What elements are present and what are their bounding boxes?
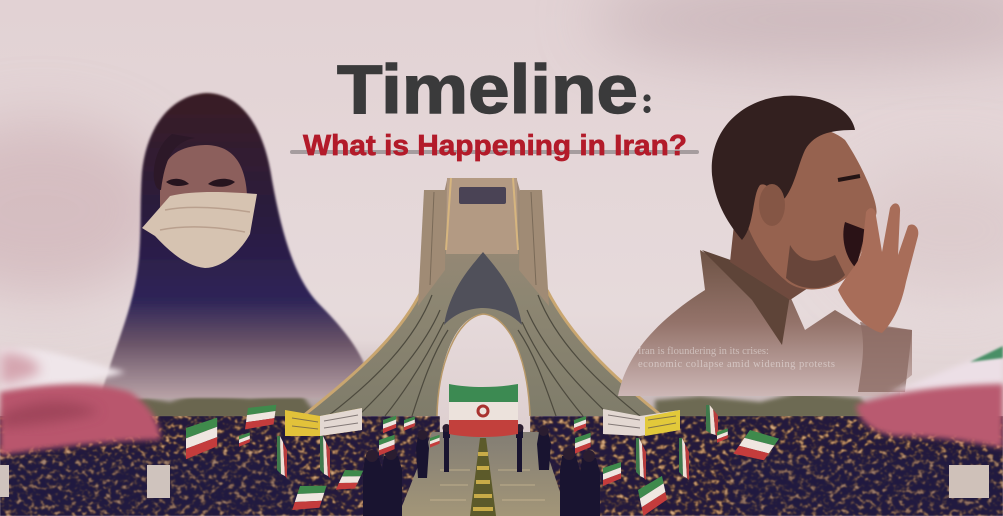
face [160, 145, 247, 225]
placards [147, 465, 170, 498]
small flags [186, 401, 779, 516]
large blurred flag left [0, 348, 160, 455]
tower ribs [328, 295, 640, 416]
heading: subtitle: What is Happening in Iran? [303, 130, 687, 162]
banner text marks [292, 415, 358, 429]
tower side columns [418, 190, 446, 306]
banner right [603, 409, 680, 436]
Azadi tower [303, 178, 662, 416]
shirt [618, 250, 912, 396]
underline strike [290, 150, 699, 154]
shouting man [618, 96, 918, 396]
banner left [285, 408, 362, 436]
colon [643, 94, 651, 113]
tower lattice [444, 252, 522, 325]
tower top block [446, 178, 518, 254]
eyes [166, 179, 235, 187]
plaza reflections [430, 470, 545, 500]
crowd [0, 416, 1003, 516]
tower legs [303, 180, 662, 416]
watermark line two: economic collapse amid widening protests [638, 359, 835, 370]
central plaza [363, 424, 600, 516]
collar [702, 250, 790, 345]
hand [838, 203, 918, 333]
tower golden edges [303, 290, 662, 416]
skyline trees [110, 392, 880, 420]
banner text marks right [608, 415, 676, 428]
hijab [100, 93, 372, 398]
protest banners [0, 408, 989, 498]
standing people [363, 430, 600, 516]
central flag [449, 384, 518, 437]
open mouth [843, 222, 866, 268]
large blurred flag right [856, 346, 1003, 448]
watermark text: Iran is floundering in its crises: [638, 346, 769, 357]
flower row [470, 438, 496, 516]
ear [759, 184, 785, 226]
woman in hijab [100, 93, 372, 398]
neck [730, 215, 820, 300]
face [735, 126, 877, 289]
heading: Timeline: Timeline [337, 51, 638, 128]
eye [838, 176, 860, 180]
title [290, 51, 699, 162]
face mask [142, 192, 257, 268]
people heads [366, 424, 595, 462]
hair [712, 96, 855, 240]
beard [786, 245, 845, 288]
